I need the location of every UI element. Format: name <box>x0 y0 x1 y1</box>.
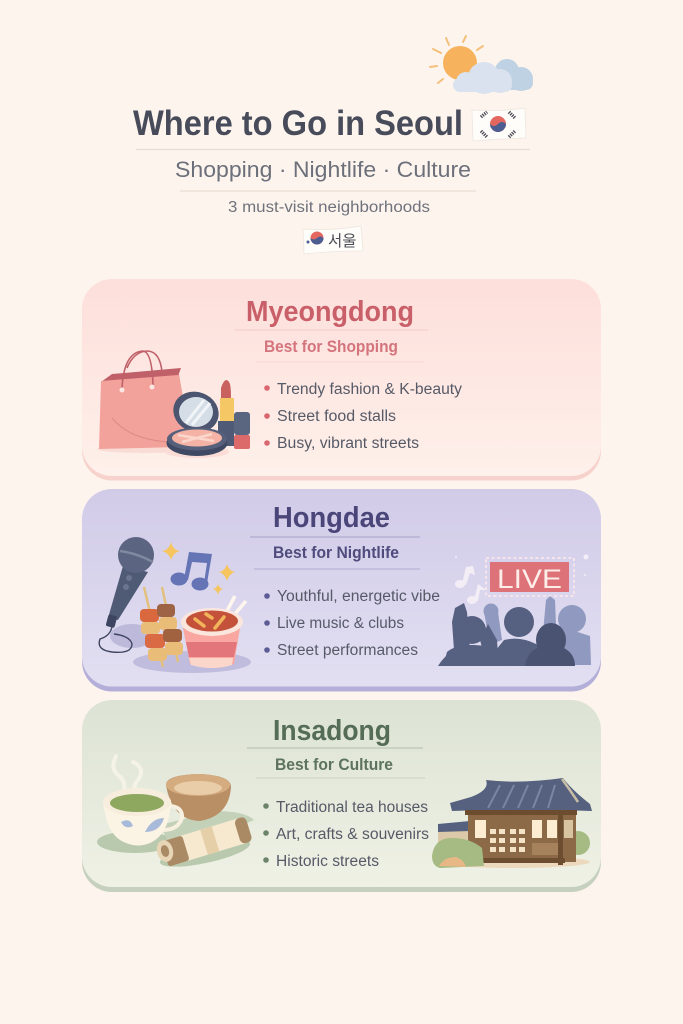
heading: Hongdae: Hongdae <box>273 502 390 534</box>
illustration: concert crowd <box>438 596 591 666</box>
list: Hongdae highlights: Youthful, energetic vibe <box>277 588 440 605</box>
list: Insadong highlights <box>263 799 429 870</box>
subheading: Best for Culture <box>275 756 393 774</box>
list: Myeongdong highlights: Trendy fashion & K-beauty <box>277 381 462 398</box>
icon: lipstick and cosmetics <box>218 380 250 449</box>
icon: tea cup and bowl <box>97 756 254 853</box>
badge: Seoul in Korean <box>303 226 363 254</box>
list: Hongdae highlights: Street performances <box>277 642 418 659</box>
card background <box>82 700 601 892</box>
panel: Insadong <box>82 700 601 892</box>
icon: Korean flag <box>472 108 526 141</box>
icon: shopping bag <box>97 351 193 453</box>
list: Hongdae highlights: Live music & clubs <box>277 615 404 632</box>
subheading: Best for Nightlife <box>273 544 399 562</box>
panel: Hongdae <box>82 489 601 692</box>
subheading: Best for Shopping <box>264 338 398 356</box>
list: Myeongdong highlights: Street food stalls <box>277 408 396 425</box>
panel: Myeongdong <box>82 279 601 480</box>
illustration: hanok house <box>432 778 592 868</box>
list: Insadong highlights: Art, crafts & souvenirs <box>276 826 429 843</box>
icon: microphone <box>99 537 154 652</box>
list: Myeongdong highlights: Busy, vibrant streets <box>277 435 419 452</box>
icon: scroll <box>154 816 253 872</box>
icon: music note <box>170 552 212 590</box>
icon: compact <box>165 385 229 458</box>
card background <box>82 279 601 480</box>
heading: Insadong: Insadong <box>273 715 391 747</box>
card background <box>82 489 601 692</box>
list: Insadong highlights: Traditional tea houses <box>276 799 428 816</box>
badge: Seoul in Korean: 서울 <box>328 232 357 250</box>
icon: LIVE sign: LIVE <box>497 564 562 594</box>
icon: sun and clouds <box>430 36 533 94</box>
tagline: 3 must-visit neighborhoods <box>228 199 430 216</box>
icon: LIVE sign <box>486 558 574 596</box>
heading: Myeongdong: Myeongdong <box>246 296 414 328</box>
icon: sparkles <box>162 542 235 595</box>
icon: white music notes <box>455 554 588 604</box>
list: Insadong highlights: Historic streets <box>276 853 379 870</box>
list: Myeongdong highlights <box>264 381 462 452</box>
list: Hongdae highlights <box>264 588 440 659</box>
subtitle: Shopping · Nightlife · Culture <box>175 157 471 182</box>
icon: skewers <box>133 587 251 673</box>
title: Where to Go in Seoul <box>133 104 463 143</box>
icon: tteokbokki cup <box>181 596 246 668</box>
